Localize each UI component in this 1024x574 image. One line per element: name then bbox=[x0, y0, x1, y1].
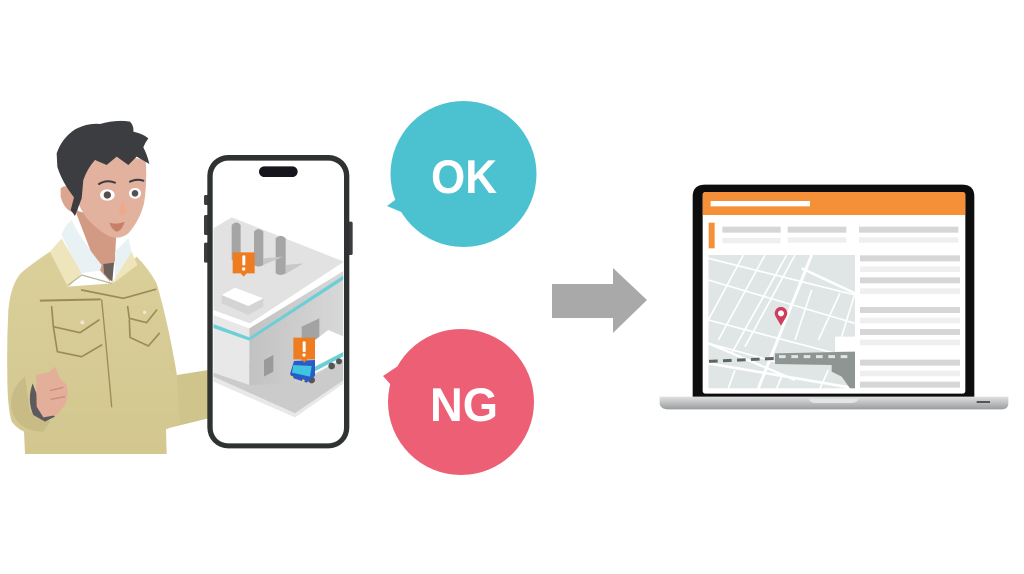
roof white edge bbox=[213, 262, 344, 328]
hand bbox=[36, 367, 68, 417]
phone notch bbox=[259, 166, 298, 177]
right column text rows bbox=[860, 255, 960, 388]
ear bbox=[61, 186, 78, 213]
top info rows bbox=[722, 227, 958, 243]
smartphone with factory scene bbox=[204, 155, 353, 448]
nose bbox=[119, 201, 128, 216]
railway station bbox=[775, 352, 855, 388]
doors bbox=[264, 355, 273, 377]
mouth bbox=[109, 222, 125, 232]
OK label: OK bbox=[431, 150, 497, 203]
jacket stitching and pockets bbox=[41, 275, 159, 407]
alert marker upper bbox=[233, 252, 255, 277]
building left wall bbox=[213, 315, 249, 385]
jacket body bbox=[7, 252, 180, 454]
truck trailer bbox=[315, 330, 344, 373]
map bbox=[708, 255, 855, 388]
screen bbox=[703, 192, 965, 394]
far arm reaching to phone bbox=[163, 370, 208, 429]
beige collar bbox=[50, 238, 82, 288]
laptop lid bbox=[693, 185, 974, 397]
neck bbox=[75, 210, 117, 282]
NG label: NG bbox=[430, 378, 498, 431]
orange accent bbox=[709, 223, 715, 248]
arrow pointing to laptop bbox=[552, 268, 647, 333]
eyebrows bbox=[99, 180, 143, 184]
roof bbox=[213, 217, 344, 325]
person: worker in beige jacket bbox=[7, 121, 208, 454]
undershirt bbox=[103, 263, 114, 282]
teal stripes bbox=[213, 324, 249, 341]
white inner collar bbox=[62, 220, 132, 278]
alert marker lower bbox=[293, 338, 315, 363]
NG speech bubble bbox=[383, 329, 534, 475]
laptop with dashboard bbox=[660, 185, 1008, 409]
laptop base bbox=[660, 397, 1008, 409]
map pin bbox=[775, 307, 787, 326]
phone side buttons bbox=[204, 195, 353, 263]
building right wall bbox=[249, 271, 344, 385]
OK speech bubble bbox=[387, 101, 536, 247]
phone body bbox=[207, 155, 349, 448]
pocket buttons bbox=[80, 320, 84, 324]
eyes bbox=[100, 189, 115, 201]
sleeve cuff bbox=[11, 377, 50, 432]
orange header bbox=[703, 192, 965, 215]
hair bbox=[57, 121, 149, 216]
rooftop box bbox=[222, 295, 264, 315]
ground bbox=[213, 357, 344, 413]
face bbox=[77, 157, 146, 238]
truck cab bbox=[290, 360, 315, 383]
factory illustration bbox=[213, 217, 344, 417]
chimneys bbox=[232, 222, 241, 260]
